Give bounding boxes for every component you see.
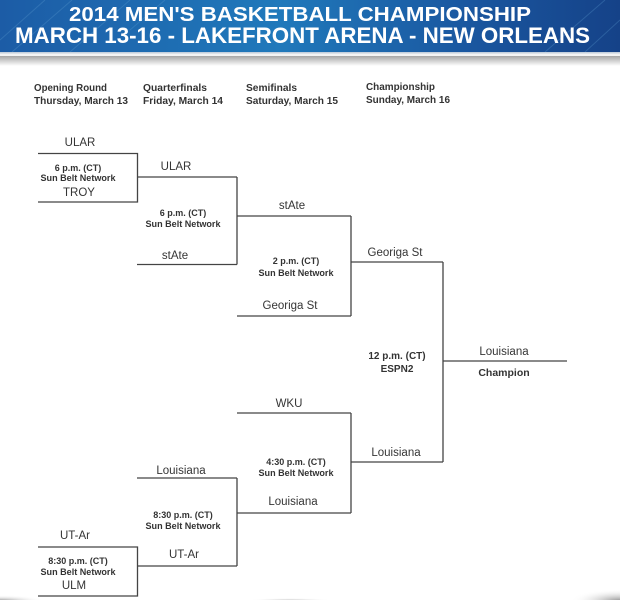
semifinal game 1: 2 p.m. (CT) — [273, 256, 319, 266]
heading: quarterfinals: Quarterfinals — [143, 83, 207, 94]
semifinal game 2: WKU — [276, 398, 302, 410]
quarterfinal game 1: 6 p.m. (CT) — [160, 208, 206, 218]
heading: quarterfinals: Friday, March 14 — [143, 96, 223, 107]
round headings — [34, 82, 450, 107]
champion: Champion — [478, 367, 530, 379]
champion — [478, 346, 530, 379]
bottom edge shading — [0, 589, 620, 600]
header banner — [0, 0, 620, 66]
heading: opening round: Opening Round — [34, 83, 107, 94]
quarterfinal game 1: stAte — [162, 250, 188, 262]
quarterfinal game 1: Sun Belt Network — [146, 219, 221, 229]
heading: opening round: Thursday, March 13 — [34, 96, 128, 107]
semifinal game 2: 4:30 p.m. (CT) — [266, 457, 326, 467]
championship game: 12 p.m. (CT) — [368, 351, 426, 362]
opening round game 1: 6 p.m. (CT) — [55, 163, 101, 173]
semifinal game 1: stAte — [279, 200, 305, 212]
opening round game 2: ULM — [62, 580, 86, 592]
heading: semifinals: Saturday, March 15 — [246, 96, 338, 107]
bracket lines — [38, 154, 567, 596]
semifinal game 1: Georiga St — [263, 300, 318, 312]
heading: championship: Sunday, March 16 — [366, 95, 450, 106]
title line 2: MARCH 13-16 - LAKEFRONT ARENA - NEW ORLEANS — [15, 23, 590, 48]
quarterfinal game 2: 8:30 p.m. (CT) — [153, 510, 213, 520]
opening round game 1: ULAR — [65, 137, 95, 149]
opening round game 2: 8:30 p.m. (CT) — [48, 556, 108, 566]
heading: championship: Championship — [366, 82, 435, 93]
quarterfinal game 2: UT-Ar — [169, 549, 199, 561]
semifinal game 1 — [258, 200, 334, 312]
quarterfinal game 1: ULAR — [161, 161, 191, 173]
quarterfinal game 1 — [146, 161, 221, 262]
quarterfinal game 2 — [146, 465, 221, 561]
champion: Louisiana — [479, 346, 529, 358]
opening round game 1: TROY — [63, 187, 95, 199]
opening round game 2: Sun Belt Network — [40, 567, 116, 577]
heading: semifinals: Semifinals — [246, 83, 297, 94]
opening round game 2 — [40, 530, 116, 592]
championship game — [368, 247, 426, 459]
championship game: Georiga St — [368, 247, 423, 259]
championship game: ESPN2 — [381, 364, 414, 375]
quarterfinal game 2: Louisiana — [156, 465, 206, 477]
quarterfinal game 2: Sun Belt Network — [146, 521, 221, 531]
opening round game 1 — [40, 137, 116, 199]
opening round game 1: Sun Belt Network — [40, 173, 116, 183]
opening round game 2: UT-Ar — [60, 530, 90, 542]
semifinal game 2 — [258, 398, 334, 508]
title line 1: 2014 MEN'S BASKETBALL CHAMPIONSHIP — [69, 3, 531, 26]
semifinal game 1: Sun Belt Network — [258, 268, 334, 278]
semifinal game 2: Sun Belt Network — [258, 468, 334, 478]
semifinal game 2: Louisiana — [268, 496, 318, 508]
championship game: Louisiana — [371, 447, 421, 459]
